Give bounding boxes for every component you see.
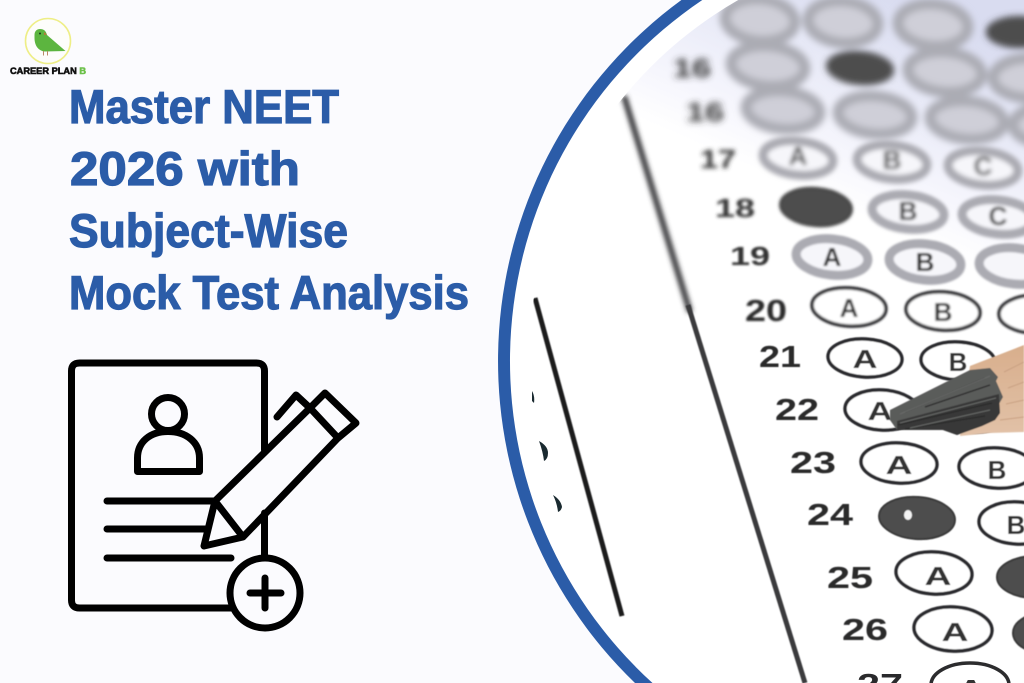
pencil [204,393,356,546]
row 19: A [823,242,842,272]
row 26 [842,605,1024,655]
row 20 [745,285,1024,333]
blurred top rows [673,0,1024,144]
row 22 [775,388,1012,432]
title: Master NEET [69,80,339,133]
row 17: B [883,145,901,175]
row 21 [759,337,996,382]
pencil on answer sheet [890,345,1024,436]
title [69,80,469,319]
row 26: 26 [842,612,888,647]
document outline [72,363,264,608]
row 18: B [899,196,917,226]
logo wordmark: CAREER PLAN B [10,66,86,77]
wood grain [1000,362,1024,420]
row 20: 20 [745,293,787,328]
pencil lead [890,368,1003,435]
row 25: A [924,561,952,591]
row 21: B [949,347,967,377]
paper shading [647,0,1024,208]
blurred top rows: 16 [686,97,724,127]
lead grooves [898,378,992,429]
row 22: 22 [775,392,819,427]
blue circular frame [498,0,702,683]
row 19: B [916,247,934,277]
logo: Career Plan B [10,18,86,77]
row 25: 25 [827,560,873,595]
row 24: 24 [807,497,854,532]
photo: OMR answer sheet [532,0,1024,683]
row 21: A [852,344,878,374]
row 21: 21 [759,339,801,374]
row 19: 19 [730,241,770,271]
row 18: C [989,201,1008,231]
sheet rule lines [532,96,805,683]
row 23 [790,441,1024,490]
title: Mock Test Analysis [69,266,469,319]
row 17: C [974,151,993,181]
logo circle with bird [26,18,70,64]
pencil wood [960,345,1024,436]
row 17 [700,137,1020,189]
blurred top rows: 16 [673,53,711,83]
row 26: A [942,617,969,647]
white photo disc [510,0,1024,683]
row 20: B [934,297,952,327]
row 22: A [868,396,893,426]
row 23: B [988,455,1006,485]
row 18 [715,185,1024,238]
row 19 [730,235,1024,288]
icon: profile document with pencil and plus [72,363,356,628]
plus circle [230,558,300,628]
row 17: 17 [700,144,736,174]
text lines [107,501,231,558]
lead lower shadow [897,394,1000,435]
row 24 [807,494,1024,546]
person [138,398,200,472]
row 20: A [840,293,859,323]
row 23: A [886,450,913,480]
title: Subject-Wise [69,204,348,257]
row 27 cropped by the frame edge [857,661,1011,683]
row 25 [827,550,1024,598]
row 23: 23 [790,445,836,480]
title: 2026 with [70,142,300,195]
row 18: 18 [715,193,755,223]
row 17: A [789,141,808,171]
